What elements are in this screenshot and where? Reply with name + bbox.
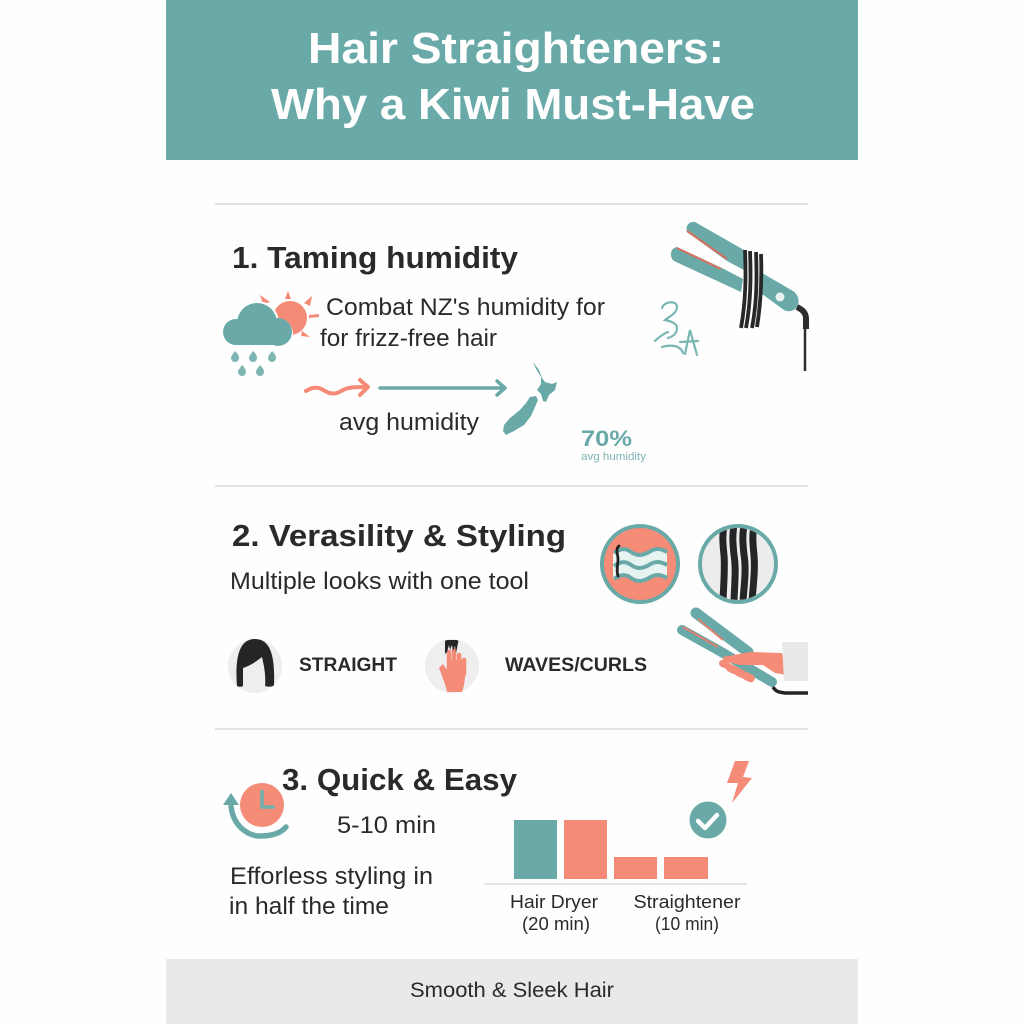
stat: 70% avg humidity: avg humidity (581, 451, 647, 463)
heading: section 1: 1. Taming humidity (232, 240, 519, 275)
text: humidity description (320, 294, 605, 352)
header banner (166, 0, 858, 160)
panel: versatility and styling (228, 518, 808, 693)
label: straight: STRAIGHT (299, 655, 397, 676)
footer: Smooth & Sleek Hair (410, 979, 614, 1002)
icon: frizz squiggle (655, 302, 698, 355)
icon: check badge (690, 802, 726, 838)
arrow: wavy coral (306, 380, 368, 395)
heading: section 3: 3. Quick & Easy (282, 762, 518, 797)
text: humidity description: for frizz-free hair (320, 325, 497, 352)
text: effortless styling: Efforless styling in (230, 863, 433, 890)
illustration: hair straightener (671, 222, 806, 371)
icon: clock with arrow (223, 783, 286, 836)
label: straightener: (10 min) (655, 913, 719, 934)
title: Hair Straighteners: (308, 24, 724, 73)
title (271, 24, 755, 129)
label: straightener: Straightener (634, 891, 740, 912)
stat: 70% avg humidity (581, 426, 647, 463)
label: avg humidity: avg humidity (339, 409, 479, 436)
icon: straight hair circle (700, 525, 776, 602)
arrow: teal straight (380, 381, 505, 395)
label: hair dryer: (20 min) (522, 913, 590, 934)
illustration: hand holding straightener (682, 613, 808, 693)
text: 5-10 min: 5-10 min (337, 812, 436, 839)
stat: 70% avg humidity: 70% (581, 426, 632, 451)
icon: wavy hair circle (602, 526, 678, 602)
label: waves and curls: WAVES/CURLS (505, 655, 647, 676)
title: Why a Kiwi Must-Have (271, 80, 755, 129)
text: effortless styling (229, 863, 433, 920)
label: hair dryer: Hair Dryer (510, 891, 598, 912)
label: straightener (634, 891, 740, 934)
text: humidity description: Combat NZ's humidity for (326, 294, 605, 321)
footer (166, 959, 858, 1024)
heading: section 2: 2. Verasility & Styling (232, 518, 566, 553)
icon: New Zealand map (503, 362, 557, 435)
icon: lightning bolt (727, 761, 752, 803)
icon: hand with hair (425, 639, 479, 693)
icon: rain cloud and sun (223, 291, 319, 376)
panel: quick and easy (223, 761, 752, 934)
text: effortless styling: in half the time (229, 893, 389, 920)
text: multiple looks: Multiple looks with one tool (230, 568, 529, 595)
icon: straight hair head (228, 639, 282, 693)
bar chart: styling time (484, 820, 747, 934)
panel: taming humidity (223, 222, 806, 463)
label: hair dryer (510, 891, 598, 934)
